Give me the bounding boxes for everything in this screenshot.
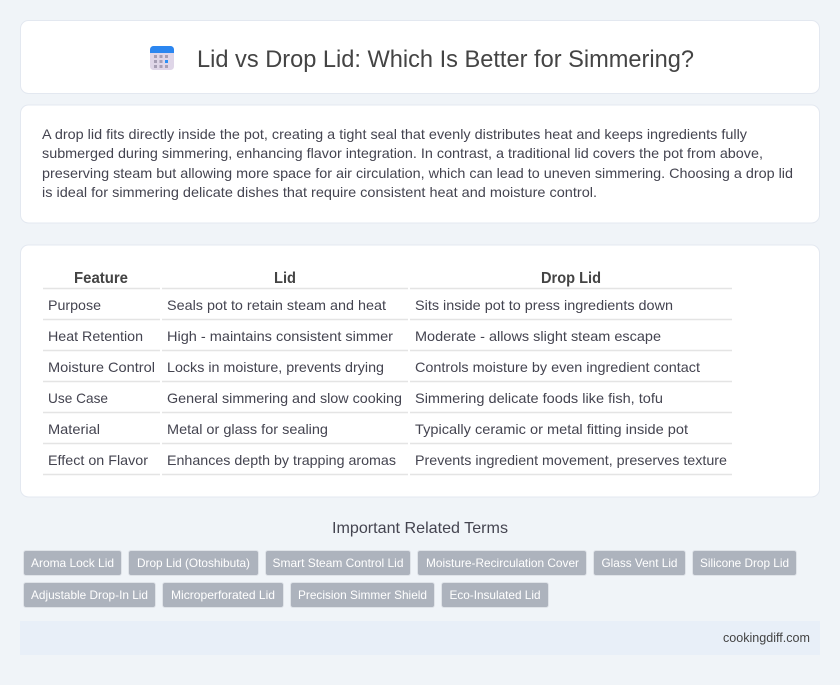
table header: Drop Lid — [541, 270, 601, 287]
tag: Moisture-Recirculation Cover — [426, 556, 579, 570]
tag — [594, 550, 686, 576]
table row: material — [48, 421, 688, 437]
tag — [442, 582, 548, 608]
heading: important related terms: Important Related Terms — [332, 520, 508, 537]
table row: use case — [48, 390, 663, 406]
table row: material: Metal or glass for sealing — [167, 421, 328, 437]
title: Lid vs Drop Lid: Which Is Better for Simmering? — [197, 46, 694, 73]
text block: description: submerged during simmering, enhancing flavor integration. In contrast, a traditional lid covers the pot from above, — [42, 145, 763, 161]
table row: effect on flavor: Enhances depth by trapping aromas — [167, 452, 396, 468]
tag — [162, 582, 284, 608]
tag: Eco-Insulated Lid — [450, 588, 540, 602]
tag — [266, 550, 410, 576]
tag: Glass Vent Lid — [602, 556, 678, 570]
table row: effect on flavor: Prevents ingredient movement, preserves texture — [415, 452, 727, 468]
text block: description: is ideal for simmering delicate dishes that require consistent heat and moisture control. — [42, 184, 597, 200]
table row: heat retention: High - maintains consistent simmer — [167, 328, 393, 344]
tag: Smart Steam Control Lid — [272, 556, 404, 570]
table row: moisture control: Moisture Control — [48, 359, 155, 375]
text block: description: A drop lid fits directly inside the pot, creating a tight seal that evenly distributes heat and keeps ingredients fully — [42, 126, 747, 142]
table row: heat retention — [48, 328, 661, 344]
tag: Microperforated Lid — [171, 588, 275, 602]
table row: heat retention: Heat Retention — [48, 328, 143, 344]
table row: use case: Simmering delicate foods like fish, tofu — [415, 390, 663, 406]
tag: Adjustable Drop-In Lid — [31, 588, 148, 602]
table row: purpose: Sits inside pot to press ingredients down — [415, 297, 673, 313]
table row: purpose: Purpose — [48, 297, 101, 313]
tag — [24, 550, 122, 576]
text block: description: preserving steam but allowing more space for air circulation, which can lead to uneven simmering. Choosing a drop lid — [42, 165, 793, 181]
tag — [692, 550, 796, 576]
table row: effect on flavor: Effect on Flavor — [48, 452, 148, 468]
table row: moisture control: Locks in moisture, prevents drying — [167, 359, 384, 375]
table row: purpose — [48, 297, 673, 313]
tag: Precision Simmer Shield — [298, 588, 427, 602]
table row: moisture control — [48, 359, 700, 375]
table row: moisture control: Controls moisture by even ingredient contact — [415, 359, 700, 375]
table row: effect on flavor — [48, 452, 727, 468]
table row: heat retention: Moderate - allows slight steam escape — [415, 328, 661, 344]
footer — [20, 621, 820, 655]
table header: Feature — [74, 270, 128, 287]
panel: title header — [20, 20, 820, 94]
icon: calendar — [150, 46, 174, 70]
tag — [418, 550, 586, 576]
tag: Silicone Drop Lid — [700, 556, 789, 570]
table header — [74, 270, 601, 287]
table row: purpose: Seals pot to retain steam and heat — [167, 297, 386, 313]
tag — [24, 582, 156, 608]
panel: intro paragraph — [20, 105, 820, 223]
table row: material: Typically ceramic or metal fitting inside pot — [415, 421, 688, 437]
table row: use case: Use Case — [48, 390, 108, 406]
table row: use case: General simmering and slow cooking — [167, 390, 402, 406]
tag: Drop Lid (Otoshibuta) — [137, 556, 250, 570]
tags: related terms — [24, 550, 796, 608]
footer source text: cookingdiff.com — [723, 631, 810, 645]
text block: description — [42, 126, 793, 200]
panel: comparison table — [20, 245, 820, 497]
table header: Lid — [274, 270, 296, 287]
tag — [128, 550, 258, 576]
table row: material: Material — [48, 421, 100, 437]
tag: Aroma Lock Lid — [31, 556, 114, 570]
tag — [290, 582, 434, 608]
